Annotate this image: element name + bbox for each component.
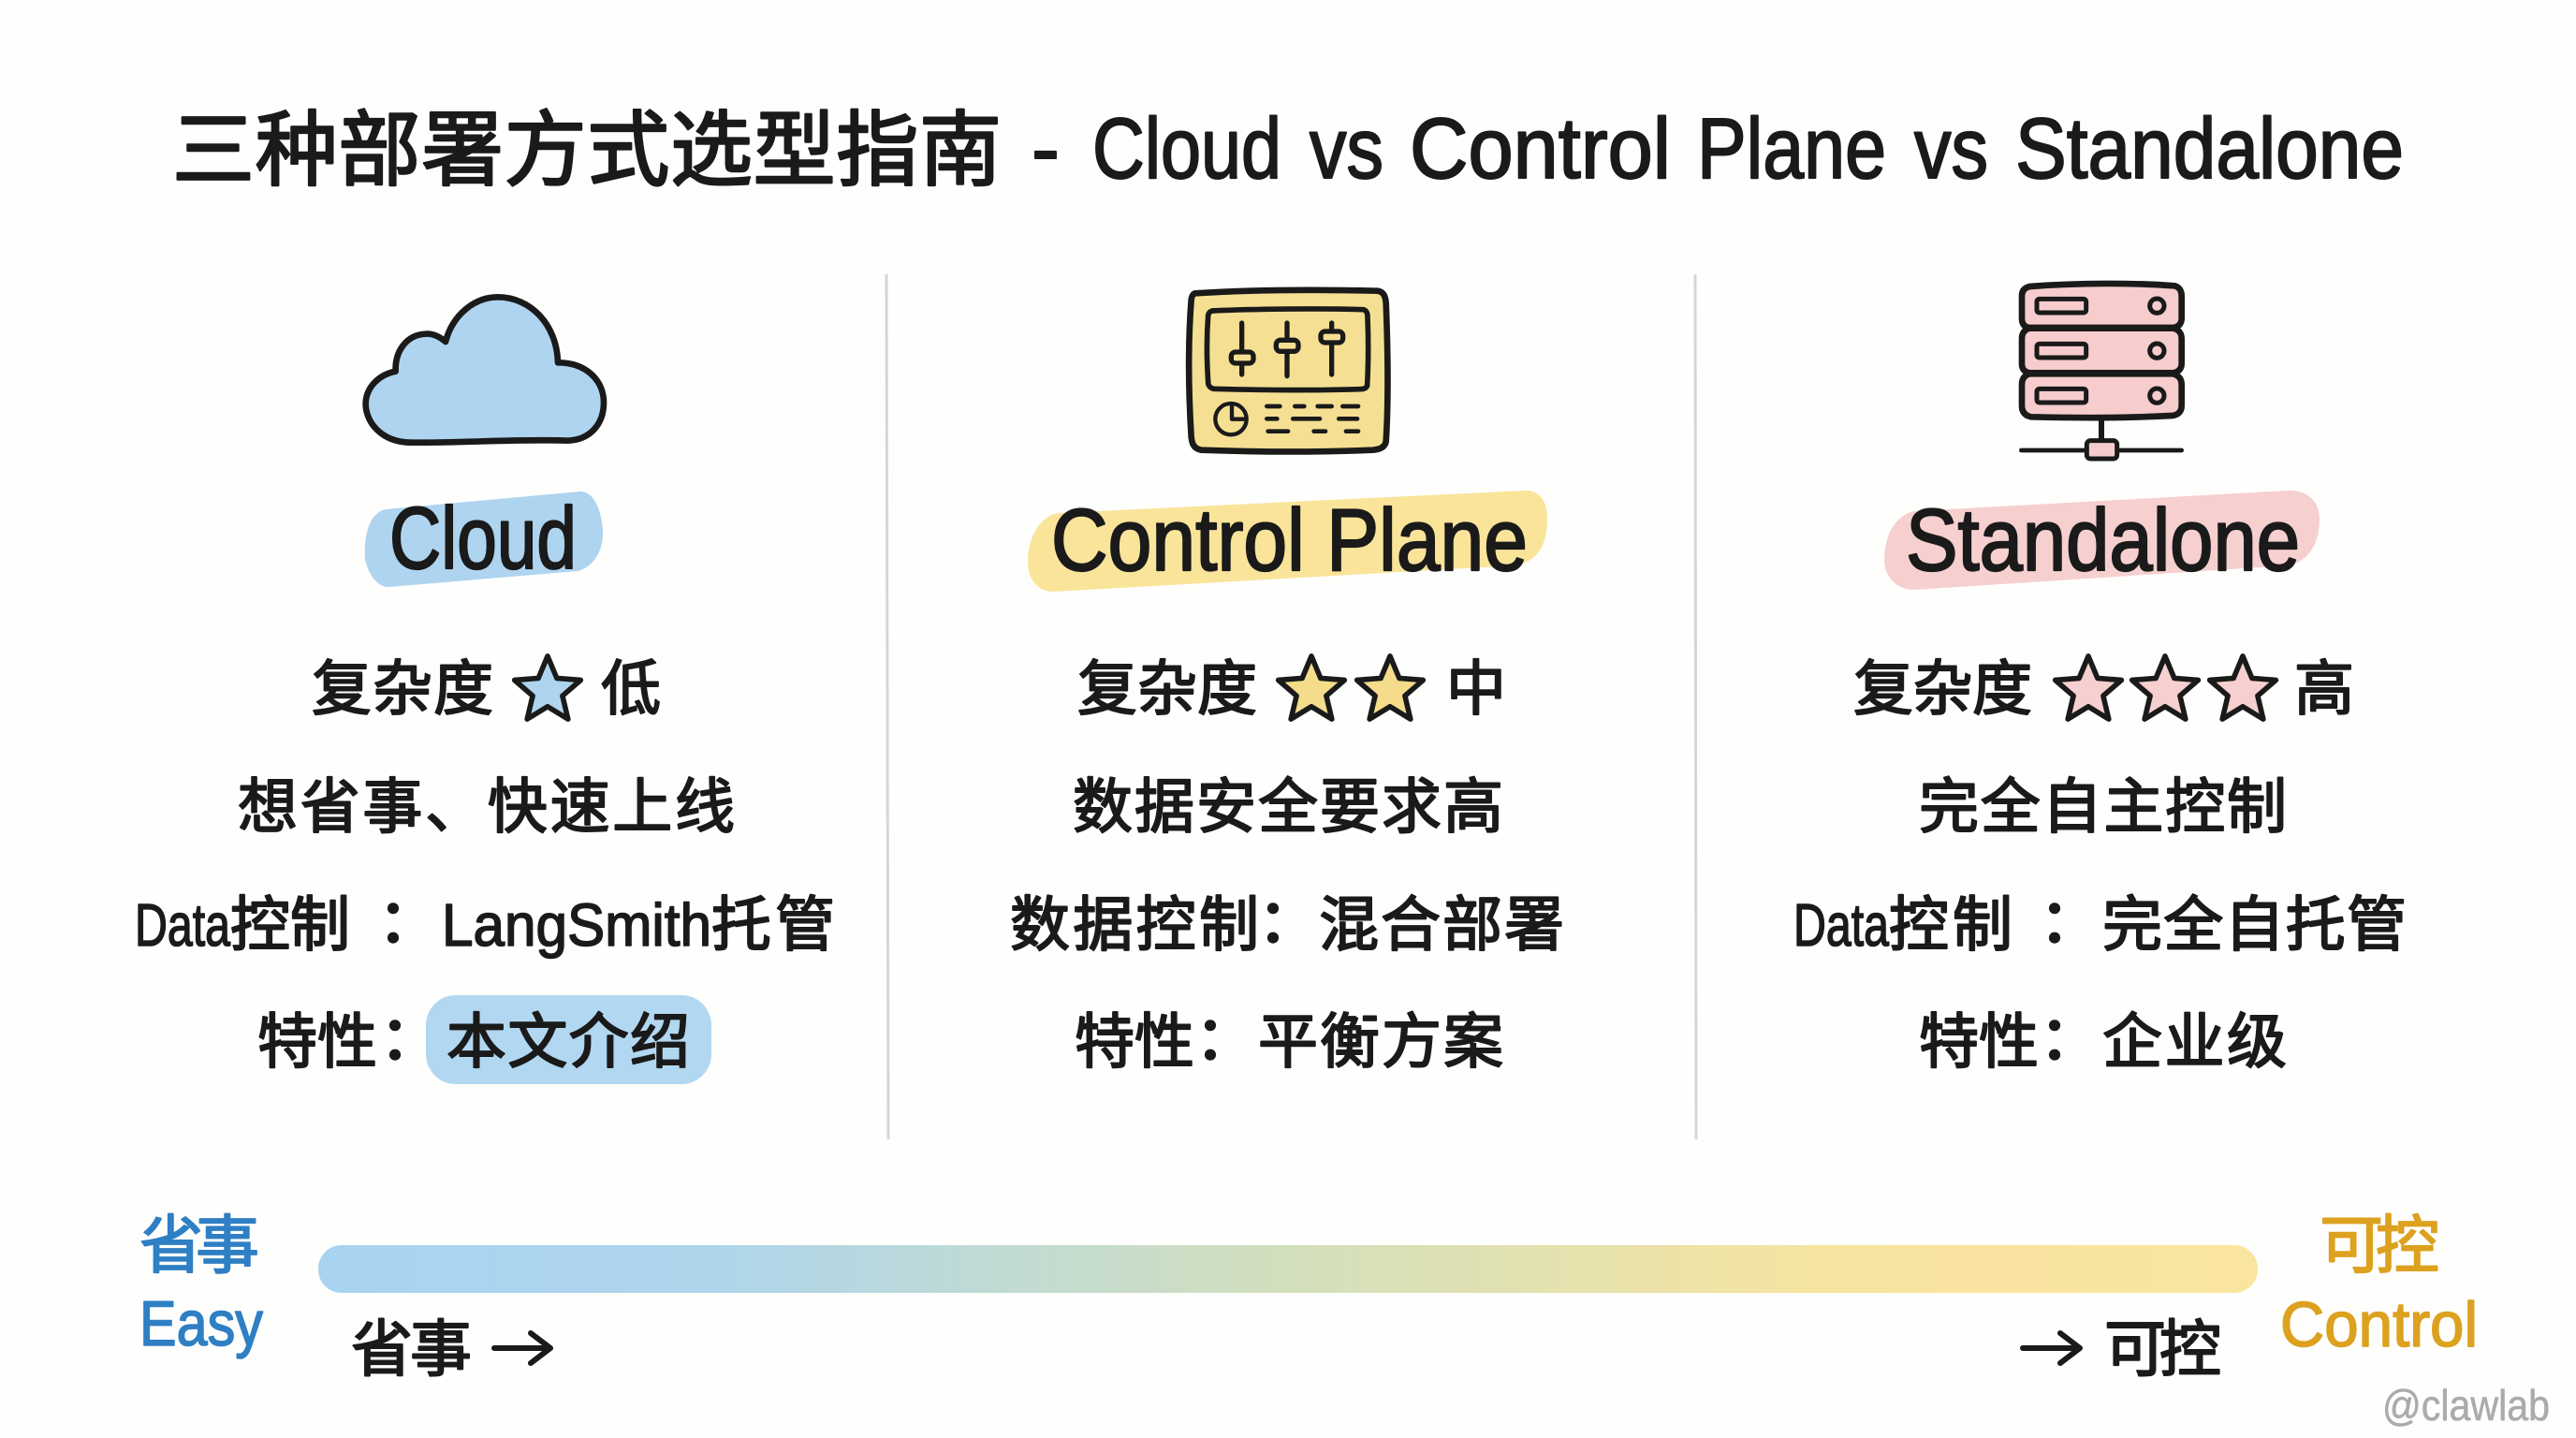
axis label: right	[2023, 1299, 2221, 1389]
text: data control: 数据控制	[1010, 877, 1259, 963]
title: 三种部署方式选型指南	[172, 84, 1002, 203]
text: data control: ：	[1243, 877, 1303, 963]
title: vs	[1310, 101, 1383, 197]
title: Cloud	[1092, 101, 1281, 197]
complexity row: high: 复杂度	[1853, 641, 2032, 727]
icon: three stars	[2056, 656, 2276, 719]
text: use case: 想省事、快速上线	[238, 759, 735, 845]
icon: two stars	[1279, 656, 1423, 719]
title: Standalone	[2015, 101, 2404, 197]
panel: Control Plane	[1010, 290, 1564, 1080]
complexity row: medium: 中	[1446, 641, 1506, 727]
axis label: left: 省事	[351, 1299, 472, 1389]
text: feature: 特性	[257, 994, 377, 1080]
title: vs	[1914, 101, 1988, 197]
title: Plane	[1697, 101, 1886, 197]
icon: star	[515, 656, 580, 719]
complexity row: high	[1853, 641, 2354, 727]
text: data control: 托管	[711, 877, 835, 963]
text: data control: Data	[135, 891, 230, 959]
axis label: right: 可控	[2104, 1299, 2221, 1389]
text: feature	[257, 994, 711, 1084]
title	[172, 84, 2404, 203]
text: feature	[1075, 994, 1503, 1080]
text: data control: 完全自托管	[2102, 877, 2407, 963]
complexity row: low: 复杂度	[312, 641, 493, 727]
text: data control	[135, 877, 835, 963]
complexity row: low	[312, 641, 661, 727]
heading: Control Plane: Control Plane	[1051, 491, 1528, 589]
complexity row: medium	[1077, 641, 1506, 727]
text: data control: ：	[2025, 877, 2085, 963]
title: -	[1032, 101, 1060, 197]
axis label: left	[351, 1299, 550, 1389]
text: data control: LangSmith	[442, 891, 711, 959]
title: Control	[1410, 101, 1671, 197]
text: feature	[1919, 994, 2287, 1080]
spectrum bar	[318, 1245, 2258, 1293]
arrow: right	[2023, 1333, 2080, 1363]
text: feature: 平衡方案	[1258, 994, 1503, 1080]
text: feature: ：	[365, 994, 425, 1080]
heading: Cloud: Cloud	[389, 489, 577, 587]
text: data control: 混合部署	[1319, 877, 1564, 963]
arrow: right	[494, 1333, 550, 1363]
icon: cloud	[366, 297, 604, 443]
text: data control: ：	[363, 877, 423, 963]
label: Control end: Control	[2280, 1289, 2478, 1360]
panel: Cloud	[135, 297, 835, 1084]
text: feature: ：	[1180, 994, 1240, 1080]
label: Control end	[2280, 1194, 2478, 1360]
panel: Standalone	[1793, 284, 2407, 1080]
text: use case: 完全自主控制	[1919, 759, 2287, 845]
text: use case: 数据安全要求高	[1073, 759, 1503, 845]
text: feature: 企业级	[2102, 994, 2287, 1080]
label: Easy end	[139, 1194, 263, 1359]
text: data control: 控制	[230, 877, 350, 963]
text: data control: 控制	[1889, 877, 2012, 963]
label: Control end: 可控	[2320, 1194, 2439, 1286]
text: data control: Data	[1793, 891, 1889, 959]
label: Easy end: 省事	[139, 1194, 259, 1286]
text: data control	[1010, 877, 1564, 963]
text: feature: 特性	[1919, 994, 2039, 1080]
text: data control	[1793, 877, 2407, 963]
icon: server rack	[2021, 284, 2182, 459]
text: feature: ：	[2025, 994, 2085, 1080]
label: Easy end: Easy	[139, 1288, 263, 1359]
complexity row: low: 低	[601, 641, 661, 727]
complexity row: high: 高	[2294, 641, 2354, 727]
text: feature: 特性	[1075, 994, 1194, 1080]
icon: control panel	[1189, 290, 1387, 451]
badge: 本文介绍: 本文介绍	[446, 994, 690, 1080]
heading: Standalone: Standalone	[1906, 491, 2300, 589]
watermark: @clawlab	[2382, 1381, 2550, 1430]
complexity row: medium: 复杂度	[1077, 641, 1257, 727]
